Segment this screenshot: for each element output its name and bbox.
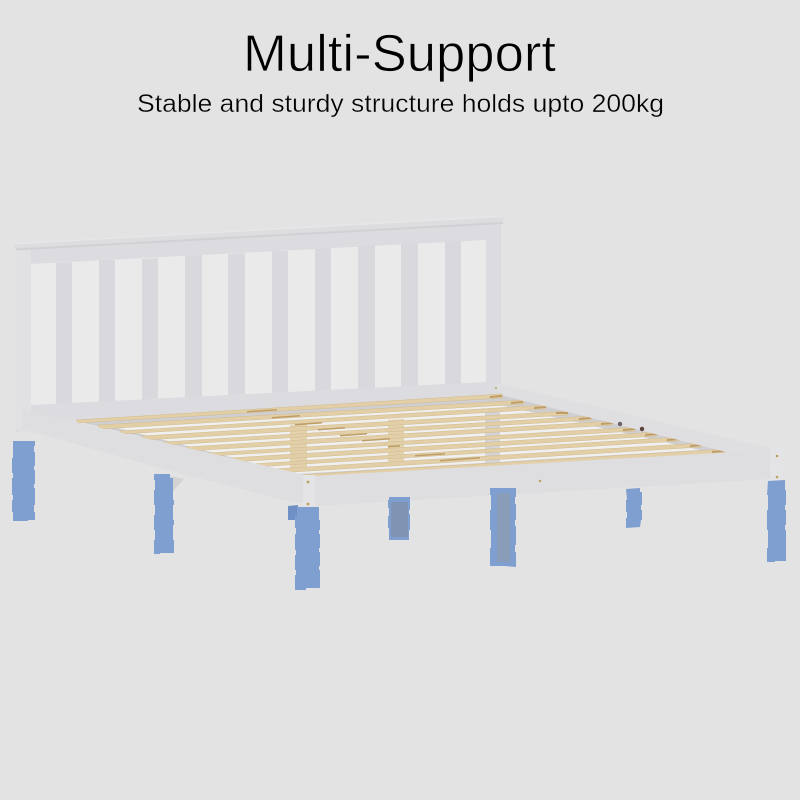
headboard — [13, 215, 504, 432]
screws — [307, 387, 778, 505]
leg 3 — [288, 505, 320, 590]
mattress slats — [76, 394, 726, 478]
leg 7 — [767, 480, 786, 562]
bracket — [170, 476, 184, 491]
bed frame illustration — [13, 215, 783, 507]
leg 6 — [626, 488, 642, 528]
corner post, right — [770, 448, 783, 481]
far side rail — [495, 383, 770, 452]
leg 1 — [12, 441, 35, 521]
near side rail — [22, 410, 305, 504]
bolts on far rail — [618, 422, 644, 431]
highlighted support legs — [12, 441, 786, 590]
headboard lower rail — [31, 382, 503, 421]
leg 5 — [490, 488, 516, 567]
title: Multi-Support — [243, 25, 557, 83]
corner post, front — [303, 475, 315, 507]
leg 4 — [388, 497, 410, 540]
front rail — [315, 450, 771, 506]
leg 2 — [154, 474, 174, 554]
subtitle: Stable and sturdy structure holds upto 200kg — [137, 90, 664, 118]
